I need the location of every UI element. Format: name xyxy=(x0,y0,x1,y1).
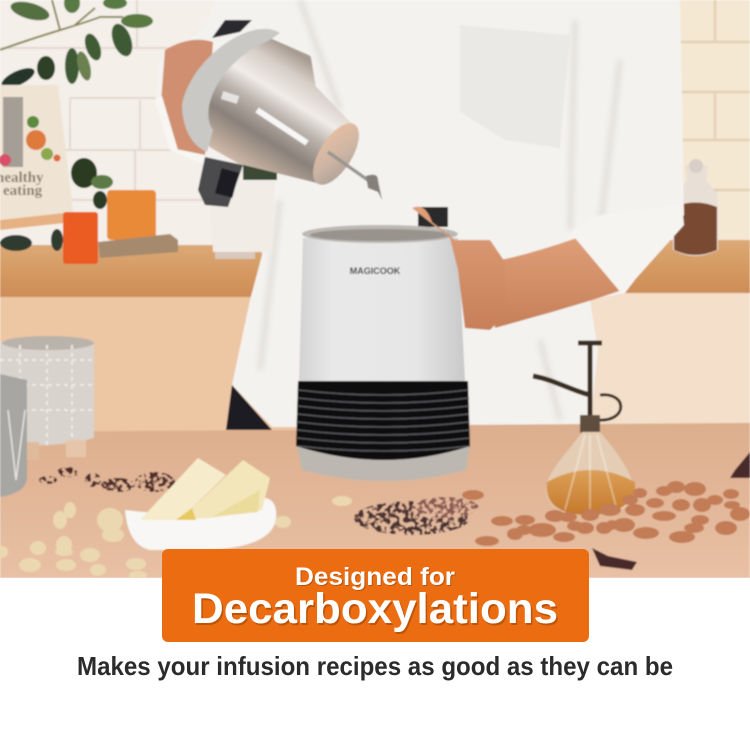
honey xyxy=(547,470,635,515)
shirt pocket and folds xyxy=(260,0,620,420)
glass ribs xyxy=(565,435,617,515)
orange title banner xyxy=(162,549,589,642)
book: healthy eating xyxy=(0,85,73,230)
heading: Designed for: Designed for xyxy=(296,564,456,592)
heading: Decarboxylations: Decarboxylations xyxy=(192,585,558,633)
kettle handle xyxy=(418,207,448,227)
spray nozzle xyxy=(533,343,602,420)
glass jar xyxy=(673,159,718,256)
top handle xyxy=(212,20,252,38)
white plant pot xyxy=(209,162,277,259)
spray bottle xyxy=(533,343,635,515)
glass bulb xyxy=(546,432,635,515)
table xyxy=(0,423,750,578)
right hand on kettle xyxy=(412,207,505,330)
blending shaft xyxy=(328,152,382,200)
motor housing xyxy=(202,40,352,180)
lower wall xyxy=(0,292,750,432)
photo: kitchen scene xyxy=(0,0,750,579)
kettle xyxy=(296,207,470,481)
shirt cuff xyxy=(155,96,205,165)
butter dish xyxy=(125,458,276,550)
shirt xyxy=(155,0,684,427)
page background below photo xyxy=(0,578,750,750)
kettle body xyxy=(299,238,465,382)
dried herbs left xyxy=(39,467,175,492)
brick wall background xyxy=(0,0,750,250)
plant sprig xyxy=(0,0,153,92)
forearm xyxy=(490,232,622,328)
patterned pot xyxy=(0,336,94,460)
heading: Designed for: Designed for xyxy=(295,563,455,591)
grey pot xyxy=(0,374,27,497)
ribbed base xyxy=(296,381,470,460)
wooden shelf left xyxy=(0,245,262,297)
cashews xyxy=(0,496,352,579)
dried herbs centre xyxy=(354,497,479,535)
logo: MAGICOOK xyxy=(350,266,401,276)
book: healthy eating: eating xyxy=(3,183,43,199)
highlights xyxy=(257,110,307,143)
rolled sleeve xyxy=(570,205,684,294)
butter sticks xyxy=(140,458,226,520)
wooden shelf right xyxy=(612,240,750,293)
blender head xyxy=(182,20,368,207)
ring xyxy=(182,29,280,152)
candle small xyxy=(63,212,98,264)
trousers xyxy=(226,385,272,430)
candle large xyxy=(107,190,156,240)
wood slice xyxy=(98,234,178,258)
heading: Decarboxylations: Decarboxylations xyxy=(194,587,560,635)
silver foot xyxy=(297,445,470,481)
grip xyxy=(198,157,243,207)
subtitle: Makes your infusion recipes as good as they can be xyxy=(77,651,673,681)
almonds xyxy=(462,481,750,546)
kettle rim xyxy=(302,225,458,243)
left hand xyxy=(160,40,213,155)
end disc xyxy=(304,116,368,192)
dried herbs right xyxy=(592,452,750,570)
second plant behind book xyxy=(0,158,113,251)
